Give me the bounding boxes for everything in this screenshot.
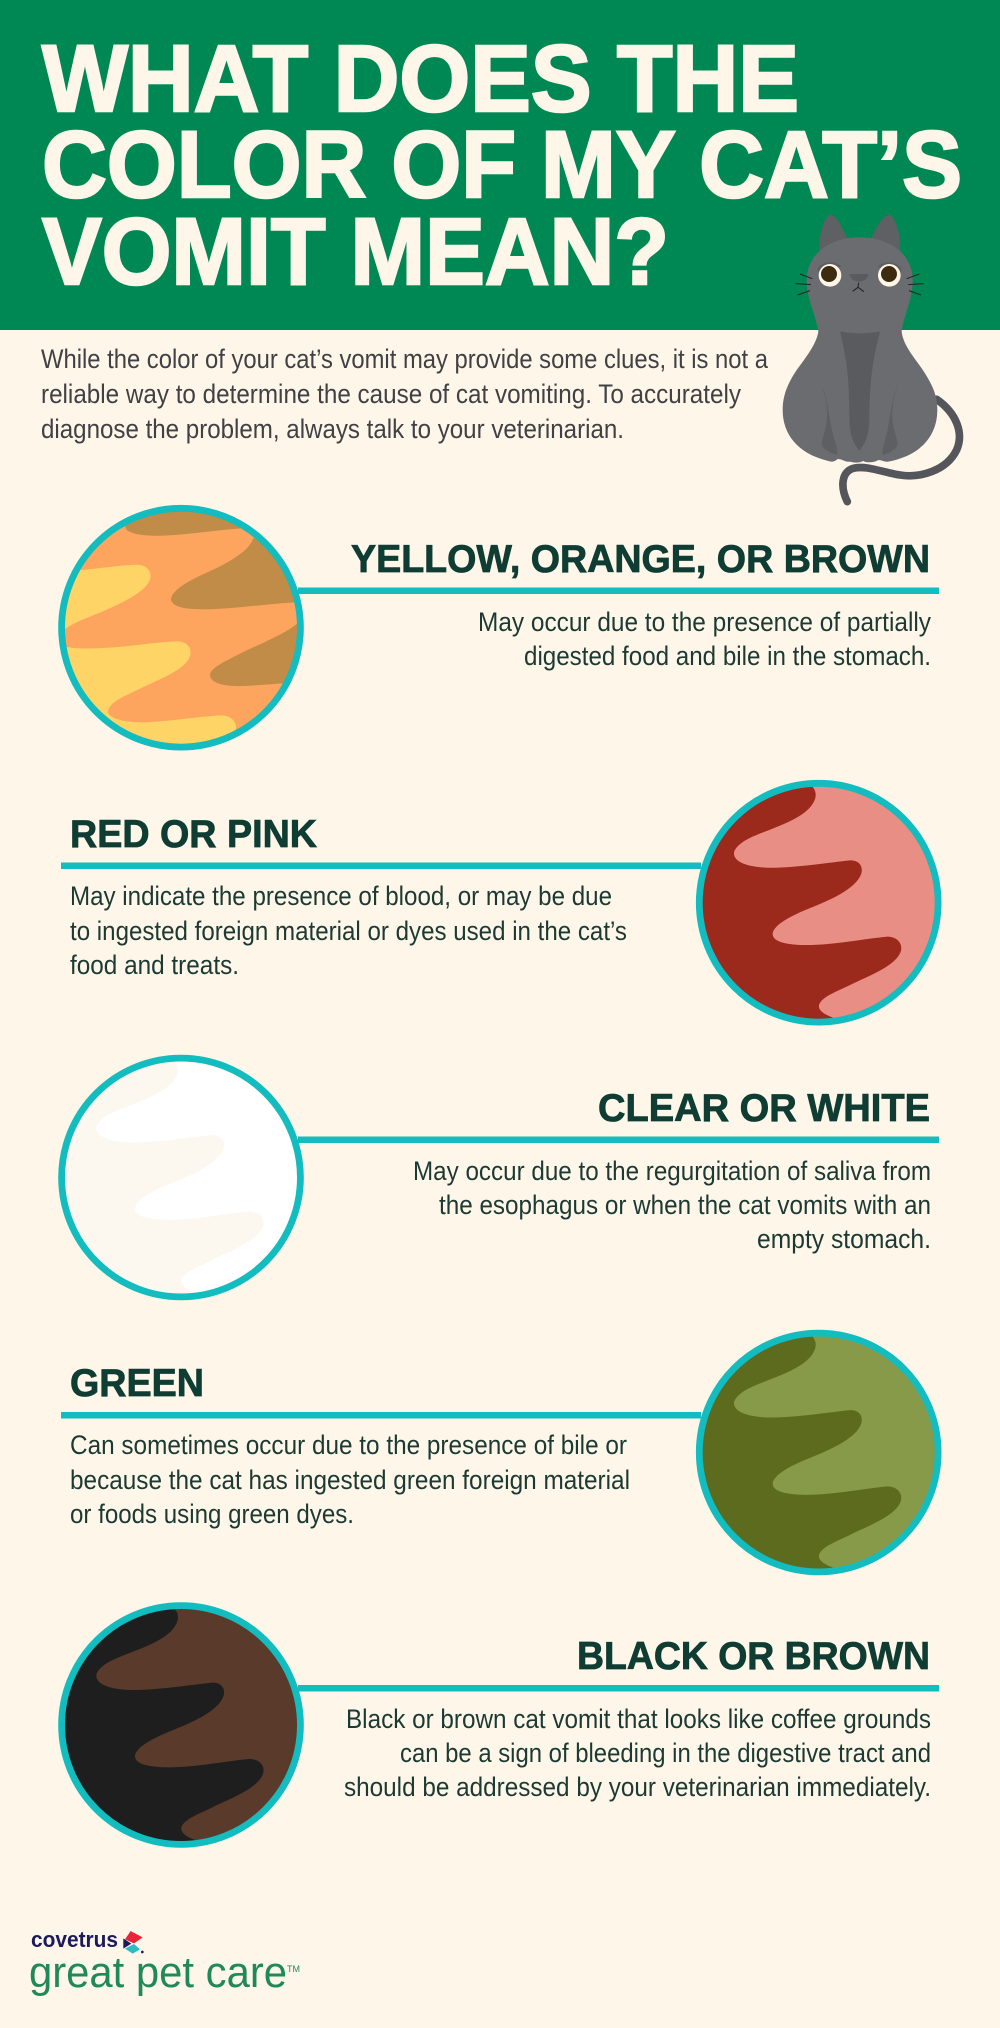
- swatch: clear white: [52, 1050, 301, 1306]
- description: to ingested foreign material or dyes used in the cat’s: [70, 916, 627, 946]
- title: VOMIT MEAN?: [42, 199, 669, 305]
- description: May occur due to the regurgitation of saliva from: [413, 1156, 931, 1186]
- description: [344, 1704, 931, 1802]
- description: can be a sign of bleeding in the digestive tract and: [400, 1738, 931, 1768]
- title: WHAT DOES THE: [42, 26, 799, 132]
- icon: covetrus mark: [123, 1931, 144, 1954]
- description: should be addressed by your veterinarian immediately.: [344, 1772, 931, 1802]
- swatch: red pink: [690, 775, 939, 1032]
- header band: [0, 0, 1000, 330]
- description: [413, 1156, 931, 1254]
- description: May indicate the presence of blood, or may be due: [70, 881, 612, 911]
- description: May occur due to the presence of partially: [478, 607, 931, 637]
- description: [70, 1430, 630, 1529]
- icon: grey cat: [783, 215, 959, 502]
- description: [70, 881, 627, 980]
- description: Black or brown cat vomit that looks like coffee grounds: [346, 1704, 931, 1734]
- panel: clear or white: [52, 1050, 939, 1306]
- description: digested food and bile in the stomach.: [524, 641, 931, 671]
- panel: green: [61, 1325, 939, 1581]
- description: food and treats.: [70, 950, 239, 980]
- swatch: yellow orange brown: [54, 500, 311, 757]
- title: COLOR OF MY CAT’S: [42, 112, 962, 218]
- logo: TM: [287, 1964, 300, 1974]
- description: because the cat has ingested green foreign material: [70, 1465, 630, 1495]
- title: [42, 26, 962, 305]
- intro text: reliable way to determine the cause of cat vomiting. To accurately: [41, 379, 741, 409]
- description: empty stomach.: [757, 1224, 931, 1254]
- great pet care wordmark: great pet care: [29, 1948, 287, 1997]
- panel: black or brown: [52, 1597, 939, 1854]
- logo: [29, 1927, 300, 1997]
- description: [478, 607, 931, 671]
- swatch: green: [690, 1325, 939, 1581]
- panel: yellow, orange, or brown: [54, 500, 939, 757]
- swatch: black brown: [52, 1597, 301, 1854]
- description: or foods using green dyes.: [70, 1499, 354, 1529]
- intro text: [41, 344, 769, 444]
- heading: BLACK OR BROWN: [577, 1635, 930, 1678]
- heading: GREEN: [70, 1362, 204, 1405]
- panel: red or pink: [61, 775, 939, 1032]
- description: the esophagus or when the cat vomits with an: [439, 1190, 931, 1220]
- covetrus wordmark: covetrus: [31, 1927, 118, 1952]
- description: Can sometimes occur due to the presence of bile or: [70, 1430, 627, 1460]
- heading: RED OR PINK: [70, 813, 317, 856]
- intro text: diagnose the problem, always talk to your veterinarian.: [41, 414, 624, 444]
- intro text: While the color of your cat’s vomit may provide some clues, it is not a: [41, 344, 769, 374]
- heading: CLEAR OR WHITE: [598, 1087, 930, 1130]
- heading: YELLOW, ORANGE, OR BROWN: [351, 538, 930, 581]
